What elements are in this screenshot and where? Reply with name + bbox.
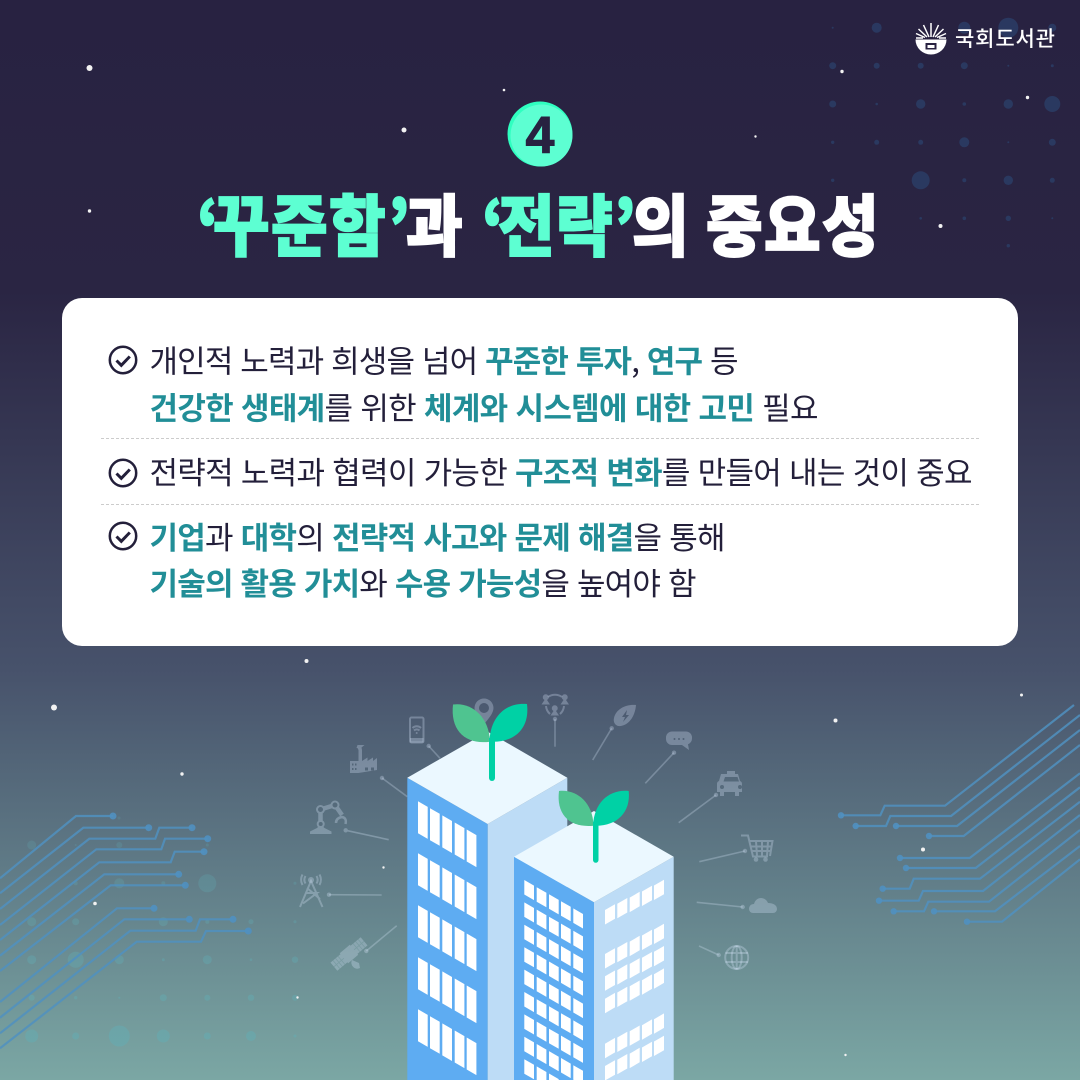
title: ’ — [388, 172, 411, 270]
title: ‘ — [482, 172, 505, 270]
icon: cloud — [697, 898, 777, 913]
sprout on right tower — [559, 791, 629, 863]
right face — [488, 778, 567, 1080]
number badge: 4 — [526, 107, 555, 165]
item 3 text: 기업과 대학의 전략적 사고와 문제 해결을 통해 — [150, 513, 726, 558]
title: ’ — [614, 172, 637, 270]
icon: people network — [542, 694, 569, 747]
item 2 check icon — [110, 460, 136, 486]
building: right tower — [514, 811, 674, 1080]
title: ‘ — [197, 172, 220, 270]
icon: shopping cart — [699, 836, 772, 862]
icon: satellite — [330, 926, 397, 972]
right windows — [605, 880, 664, 1080]
left face — [407, 778, 488, 1080]
item 1 text — [150, 336, 818, 428]
icon ring around buildings — [300, 694, 777, 972]
item 3 check icon — [110, 523, 136, 549]
circuit lines: right — [838, 705, 1080, 925]
item 3 text — [150, 513, 726, 604]
title: 과 — [406, 172, 464, 270]
icon: globe — [699, 946, 748, 969]
icon: robot arm — [310, 802, 389, 840]
panel: key points card — [62, 298, 1018, 646]
title: 꾸준함 — [213, 172, 387, 270]
left windows — [524, 880, 583, 1080]
title — [197, 172, 880, 270]
icon: factory — [350, 745, 407, 797]
title: 전략 — [498, 172, 614, 270]
roof — [514, 811, 674, 902]
icon: signal tower — [300, 874, 382, 907]
icon: energy leaf — [593, 705, 636, 760]
circuit lines: left — [0, 812, 252, 1048]
right face — [594, 857, 674, 1080]
title: 중요성 — [706, 172, 880, 270]
title: 의 — [632, 172, 690, 270]
windows — [418, 801, 476, 1075]
item 1 check icon — [110, 347, 136, 373]
icon: location pin — [474, 698, 494, 724]
item 1 text: 건강한 생태계를 위한 체계와 시스템에 대한 고민 필요 — [150, 384, 818, 428]
logo text: 국회도서관 — [955, 23, 1055, 53]
logo: National Assembly Library — [916, 23, 1055, 54]
dot grid: bottom left — [25, 816, 298, 1046]
icon: taxi — [679, 771, 742, 823]
icon: smartphone wifi — [410, 718, 440, 758]
item 2 text: 전략적 노력과 협력이 가능한 구조적 변화를 만들어 내는 것이 중요 — [150, 448, 972, 493]
roof — [407, 732, 567, 824]
logo emblem — [916, 23, 946, 54]
item 3 text: 기술의 활용 가치와 수용 가능성을 높여야 함 — [150, 559, 696, 604]
left face — [514, 857, 594, 1080]
icon: chat bubble — [645, 732, 692, 783]
number badge — [508, 102, 572, 166]
item 1 text: 개인적 노력과 희생을 넘어 꾸준한 투자, 연구 등 — [150, 336, 738, 382]
dot grid: top right — [829, 18, 1060, 247]
building: left tower — [407, 732, 567, 1080]
sprout on left tower — [453, 704, 527, 781]
